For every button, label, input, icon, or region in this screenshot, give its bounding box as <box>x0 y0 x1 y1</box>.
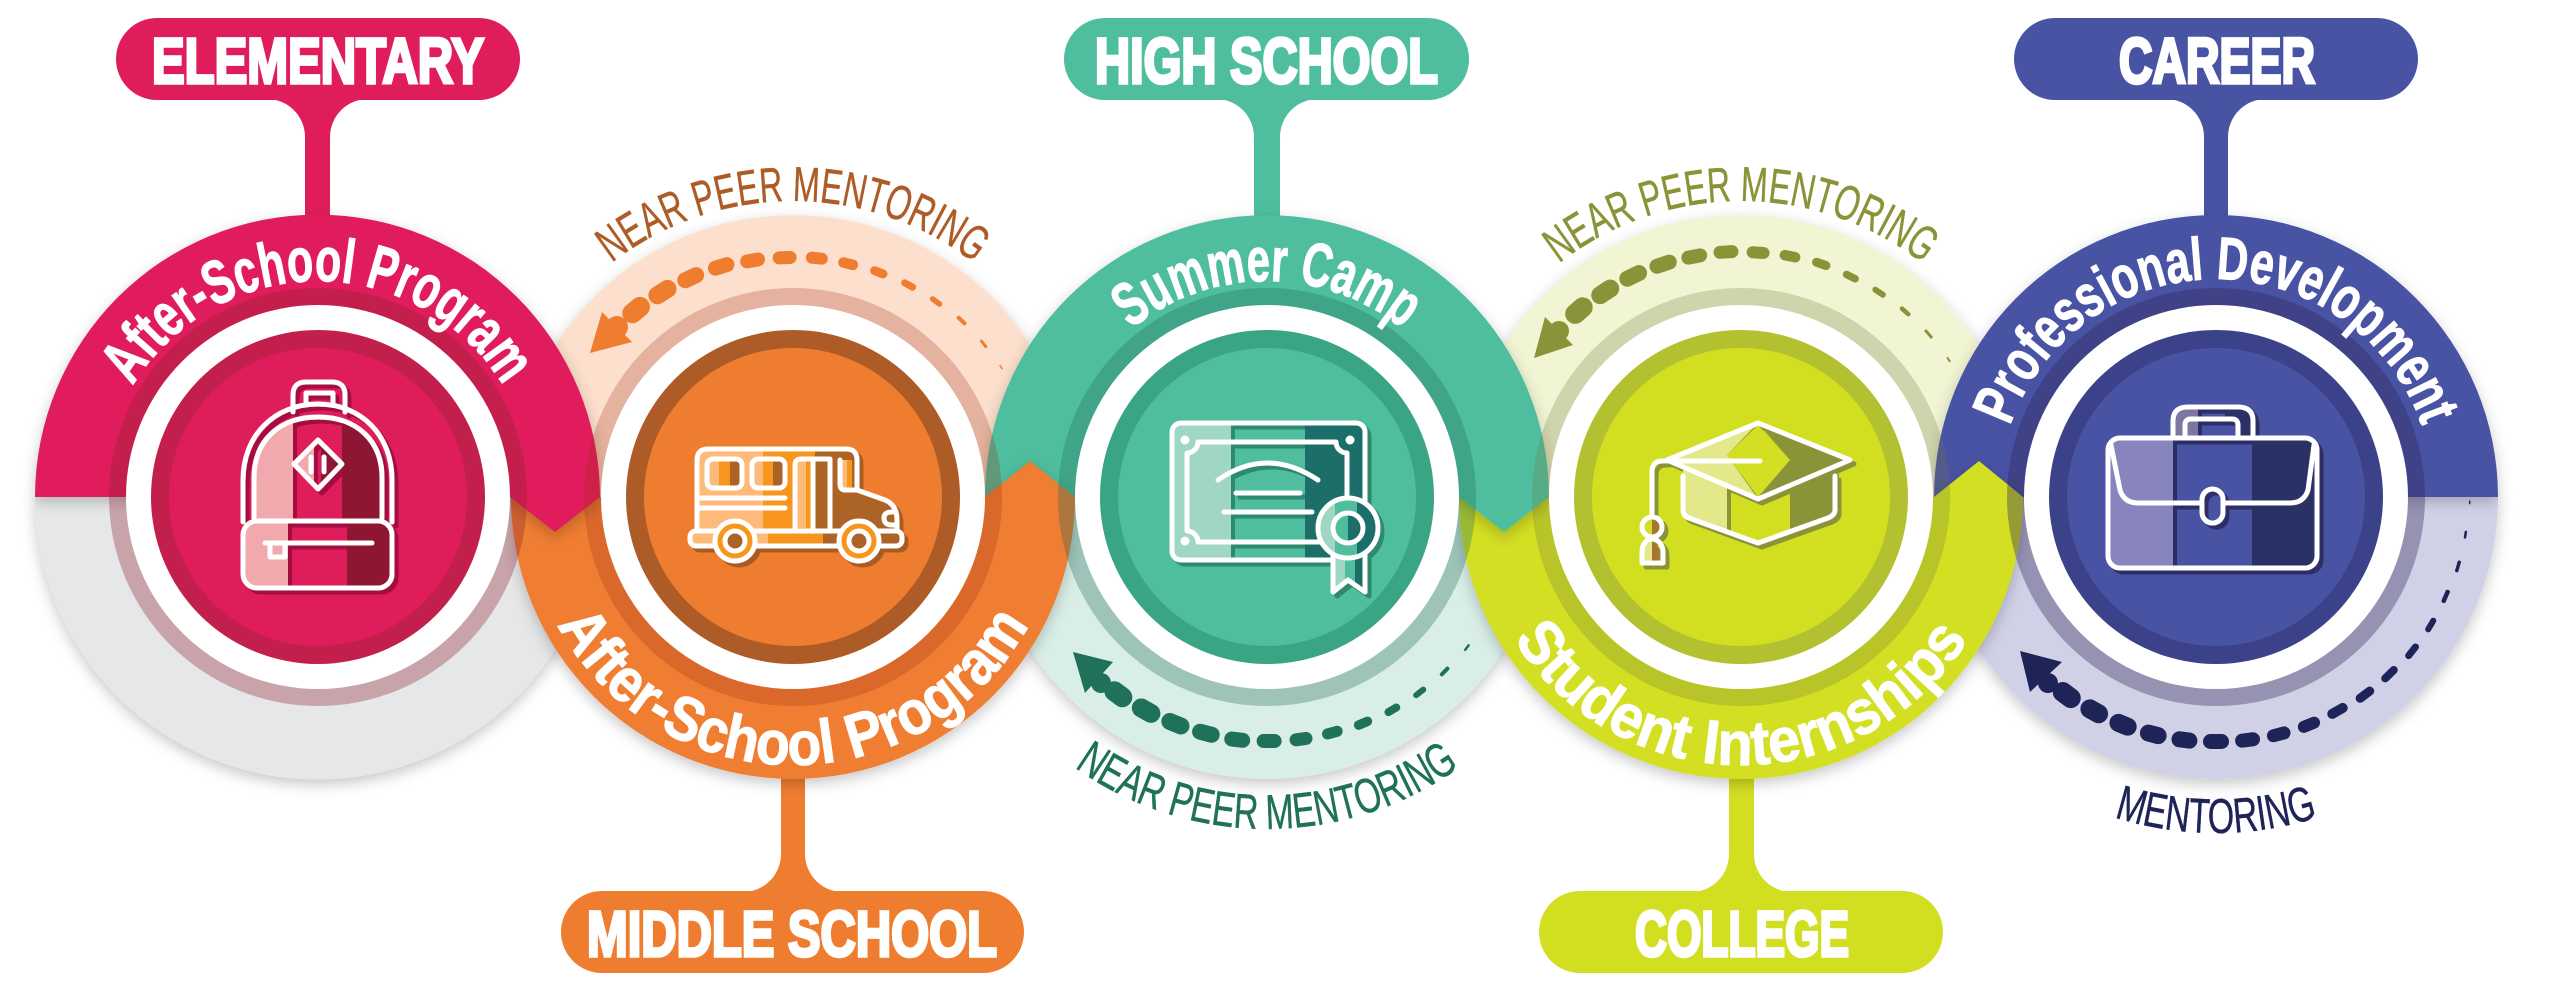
connector and pill: College: COLLEGE <box>1635 898 1849 970</box>
solid half: College lower with tab <box>1459 461 2023 779</box>
connector and pill: Middle School <box>561 775 1024 973</box>
light half: Middle School upper background <box>511 215 1075 497</box>
connector and pill: Elementary <box>116 18 520 220</box>
connector and pill: Elementary: ELEMENTARY <box>152 25 484 97</box>
light half: High School lower background <box>985 497 1549 779</box>
icon: briefcase <box>2108 407 2317 568</box>
curved label: near peer mentoring, High School: NEAR PEER MENTORING <box>1076 740 1455 830</box>
mentoring arrow: College to High School <box>1534 245 1951 363</box>
ring text: High School: Summer Camp <box>1111 243 1418 330</box>
ring text: Elementary: After-School Program <box>104 237 527 386</box>
node: College medallion <box>1518 288 1964 766</box>
icon: school bus <box>690 449 903 561</box>
ring text: Career: Professional Development <box>1972 236 2458 426</box>
curved label: mentoring, Career: MENTORING <box>2116 786 2314 834</box>
mentoring arrow: Middle School to Elementary <box>590 251 1003 370</box>
ring text: Middle School: After-School Program <box>556 613 1028 766</box>
node: Elementary medallion <box>104 237 527 706</box>
solid half: High School upper with tab <box>985 215 1549 532</box>
icon: graduation cap <box>1642 423 1850 563</box>
connector and pill: High School <box>1064 18 1469 220</box>
connector and pill: Career <box>2014 18 2418 220</box>
light half: Career lower background <box>1934 497 2498 779</box>
solid half: Elementary upper with tab <box>35 215 600 532</box>
connector and pill: High School: HIGH SCHOOL <box>1095 25 1438 97</box>
connector and pill: Career: CAREER <box>2119 25 2315 97</box>
node: Middle School medallion <box>556 288 1028 766</box>
solid half: Middle School lower with tab <box>511 461 1075 779</box>
node: High School medallion <box>1058 243 1476 706</box>
light half: College upper background <box>1459 215 2023 497</box>
connector and pill: Middle School: MIDDLE SCHOOL <box>587 898 997 970</box>
node: Career medallion <box>1972 236 2458 706</box>
ring text: College: Student Internships <box>1518 620 1964 766</box>
curved label: near peer mentoring, College: NEAR PEER MENTORING <box>1541 167 1938 262</box>
curved label: near peer mentoring, Middle School: NEAR PEER MENTORING <box>594 167 988 262</box>
solid half: Career upper <box>1934 215 2498 497</box>
icon: certificate <box>1172 423 1378 592</box>
mentoring arrow: Career to College <box>2020 500 2470 750</box>
connector and pill: College <box>1539 775 1943 973</box>
mentoring arrow: High School to Middle School <box>1073 644 1470 749</box>
light half: Elementary lower background <box>35 497 600 779</box>
icon: backpack <box>243 382 392 588</box>
